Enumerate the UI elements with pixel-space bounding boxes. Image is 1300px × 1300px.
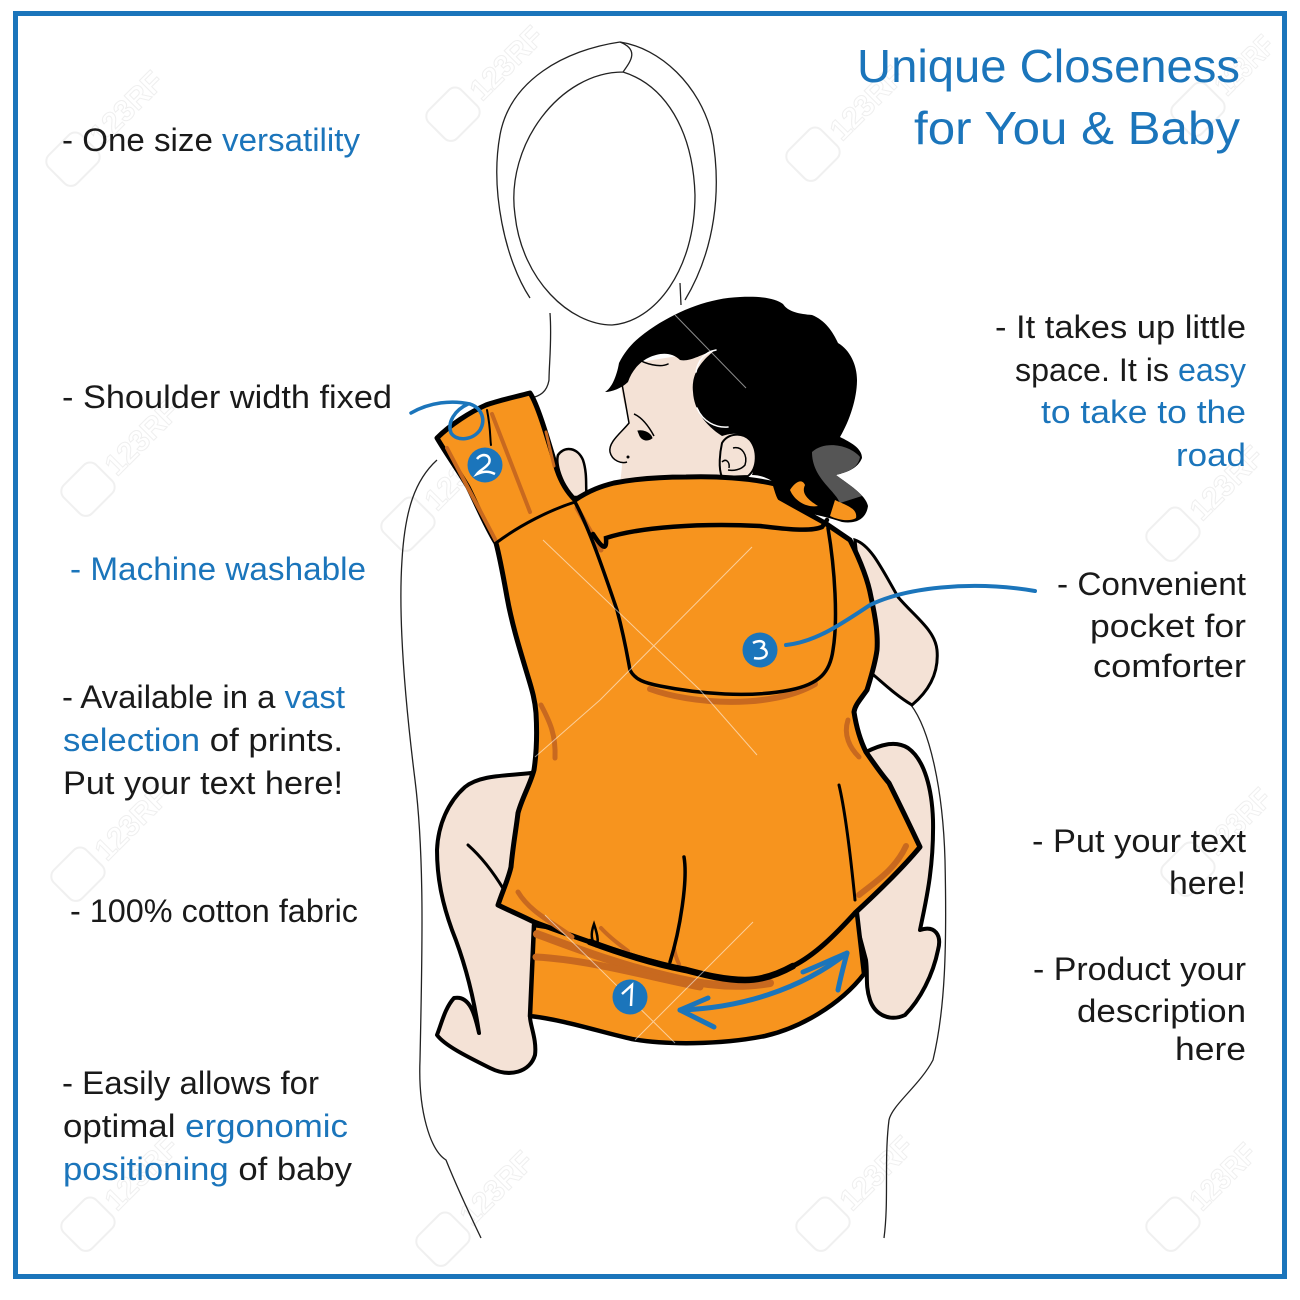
baby left leg: [437, 773, 560, 1073]
right text: put your text: here!: [1169, 865, 1246, 901]
carrier waist belt: [530, 905, 864, 1043]
title: Unique Closeness: [857, 40, 1240, 92]
left text: prints: - Available in a vast: [62, 679, 345, 715]
right text: space: space. It is easy: [1015, 352, 1246, 388]
watermarks: 123RF: [99, 1130, 186, 1217]
left text: ergonomic: - Easily allows for: [62, 1065, 319, 1101]
baby hand: [557, 449, 587, 497]
hair curl highlights: [790, 445, 862, 520]
baby right leg: [850, 744, 939, 1018]
right text: product description: [1033, 951, 1246, 1067]
numbered marker 2: [468, 448, 502, 482]
right text: pocket: [1057, 566, 1246, 684]
carrier seams and pocket: [468, 410, 855, 980]
left text: prints: [62, 679, 345, 801]
blue double-headed arrow: [680, 953, 847, 1027]
left text: machine washable: - Machine washable: [70, 551, 366, 587]
left text: one size: - One size versatility: [62, 122, 360, 158]
watermarks: 123RF: [1184, 1137, 1263, 1217]
watermarks: 123RF: [834, 1130, 921, 1217]
title: [857, 40, 1240, 154]
carrier main panel: [437, 393, 920, 980]
faint watermark lines: [535, 315, 757, 1043]
watermarks: 123RF: [464, 20, 551, 107]
right text: product description: here: [1175, 1031, 1246, 1067]
baby ear: [720, 435, 756, 477]
hair strand highlights: [636, 350, 728, 427]
left text: ergonomic: [62, 1065, 352, 1187]
baby arm on right: [855, 540, 937, 705]
numbered marker 1: [612, 980, 648, 1014]
right text: pocket: pocket for: [1090, 608, 1246, 644]
carrier shading: [447, 414, 906, 987]
baby face: [610, 350, 740, 485]
left text: ergonomic: optimal ergonomic: [63, 1108, 348, 1144]
watermarks: 123RF: [454, 1145, 541, 1232]
right text: space: to take to the: [1041, 394, 1246, 430]
right text: space: - It takes up little: [995, 309, 1246, 345]
left text: prints: selection of prints.: [63, 722, 343, 758]
baby face lines: [610, 384, 654, 463]
numbered marker 3: [742, 632, 778, 668]
left text: shoulder width: - Shoulder width fixed: [62, 379, 392, 415]
watermarks: 123RF: [99, 395, 186, 482]
right text: pocket: - Convenient: [1057, 566, 1246, 602]
left text: prints: Put your text here!: [63, 765, 343, 801]
baby hair: [605, 297, 868, 522]
right text: space: road: [1176, 437, 1246, 473]
blue callout lines: [411, 402, 1035, 645]
left text: cotton: - 100% cotton fabric: [70, 893, 358, 929]
right text: put your text: - Put your text: [1032, 823, 1246, 859]
right text: space: [995, 309, 1246, 473]
right text: product description: - Product your: [1033, 951, 1246, 987]
watermarks: 123RF: [419, 430, 506, 517]
right text: product description: description: [1077, 993, 1246, 1029]
watermarks: 123RF: [84, 65, 171, 152]
right text: pocket: comforter: [1093, 648, 1246, 684]
watermarks: 123RF: [824, 60, 911, 147]
left text: ergonomic: positioning of baby: [63, 1151, 352, 1187]
watermarks: 123RF: [1209, 29, 1281, 102]
right text: put your text: [1032, 823, 1246, 901]
watermarks: 123RF: [1199, 782, 1278, 862]
title: for You & Baby: [914, 102, 1240, 154]
parent outline: [401, 42, 946, 1238]
watermarks: 123RF: [89, 780, 176, 867]
watermarks: 123RF: [1184, 440, 1271, 527]
